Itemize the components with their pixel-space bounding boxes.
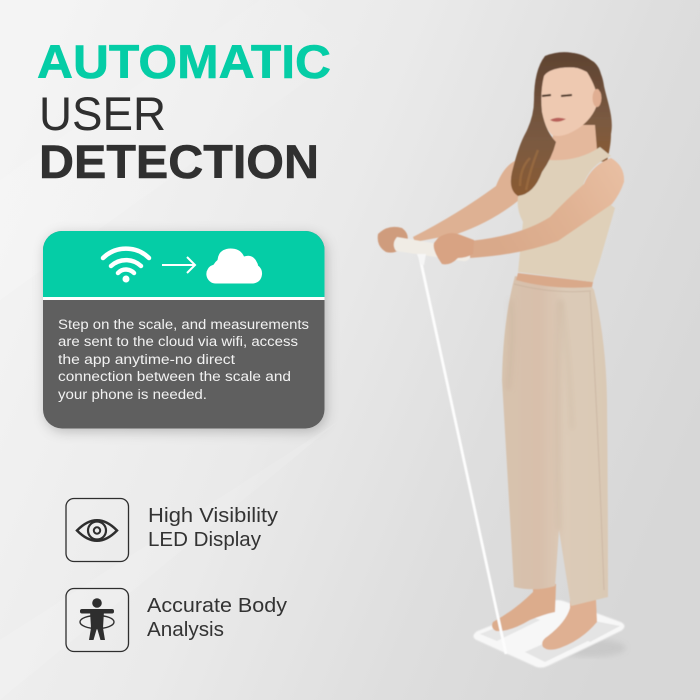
card body text: Step on the scale, and measurements bbox=[58, 317, 309, 332]
ear bbox=[592, 89, 602, 107]
card header: teal band bbox=[43, 231, 324, 297]
face bbox=[541, 66, 598, 136]
card body text: the app anytime-no direct bbox=[58, 352, 235, 367]
handle bbox=[394, 237, 471, 261]
facial features bbox=[542, 95, 572, 96]
title bbox=[37, 35, 331, 188]
tank top bbox=[518, 147, 615, 282]
near hand bbox=[434, 233, 474, 264]
feature: body analysis bbox=[66, 588, 288, 652]
far hair bbox=[560, 53, 612, 162]
far hand bbox=[378, 227, 408, 253]
card body text: connection between the scale and bbox=[58, 369, 291, 384]
feature label bbox=[147, 594, 288, 641]
feature label: High Visibility bbox=[148, 504, 279, 527]
feature: LED display bbox=[66, 498, 279, 562]
icon: wifi bbox=[103, 249, 149, 282]
card body text bbox=[58, 317, 309, 402]
card body text: your phone is needed. bbox=[58, 387, 207, 402]
far arm bbox=[413, 160, 519, 242]
feature label: Accurate Body bbox=[147, 594, 288, 617]
feature label bbox=[148, 504, 279, 551]
midriff bbox=[516, 273, 593, 288]
woman standing on the scale holding handle bbox=[378, 52, 626, 668]
feature label: Analysis bbox=[147, 618, 224, 641]
neck bbox=[548, 125, 597, 163]
handle cable bbox=[420, 258, 506, 654]
panel: cloud sync info card bbox=[43, 231, 324, 428]
hair curl highlights bbox=[520, 150, 538, 190]
pants bbox=[502, 276, 608, 606]
scale platform bbox=[473, 600, 626, 668]
near arm bbox=[470, 158, 624, 258]
icon: eye in rounded box bbox=[66, 498, 128, 562]
title line: automatic: AUTOMATIC bbox=[37, 35, 331, 88]
title line: user: USER bbox=[39, 87, 166, 140]
feature label: LED Display bbox=[148, 528, 262, 551]
front hair with curls bbox=[511, 52, 602, 196]
arrow: wifi to cloud bbox=[162, 257, 195, 273]
far foot bbox=[492, 584, 556, 631]
title line: detection: DETECTION bbox=[39, 135, 319, 188]
icon: cloud bbox=[206, 248, 262, 284]
icon: body with hoop in rounded box bbox=[66, 588, 128, 652]
card body text: are sent to the cloud via wifi, access bbox=[58, 334, 298, 349]
pants pleat shading bbox=[508, 300, 572, 530]
near foot bbox=[542, 600, 597, 650]
